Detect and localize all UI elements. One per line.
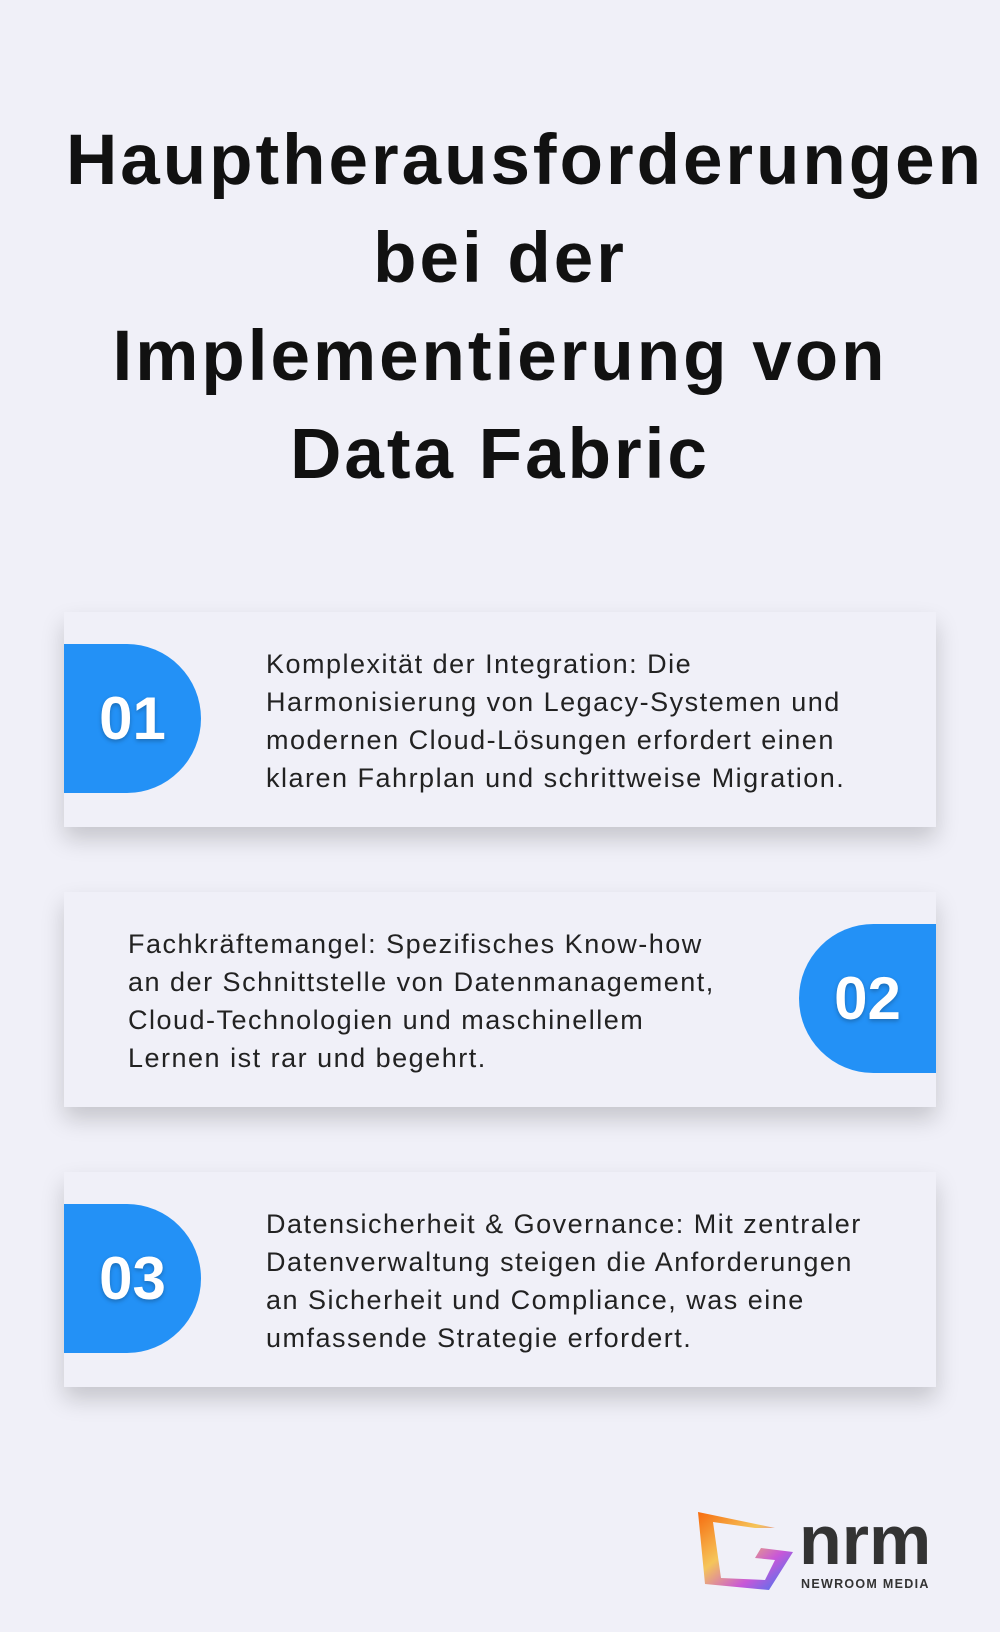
text 2: Lernen ist rar und begehrt. [128,1043,487,1073]
text 3 [266,1209,862,1353]
text 3: Datenverwaltung steigen die Anforderungen [266,1247,853,1277]
badge 02: 02 [834,965,901,1032]
text 2: Fachkräftemangel: Spezifisches Know-how [128,929,703,959]
logo: NEWROOM MEDIA [801,1577,930,1591]
text 1: klaren Fahrplan und schrittweise Migration. [266,763,845,793]
text 3: Datensicherheit & Governance: Mit zentraler [266,1209,862,1239]
title: Data Fabric [290,415,710,494]
logo [698,1510,931,1591]
text 3: an Sicherheit und Compliance, was eine [266,1285,805,1315]
text 1: modernen Cloud-Lösungen erfordert einen [266,725,835,755]
text 1: Komplexität der Integration: Die [266,649,692,679]
badge 03 [64,1204,201,1353]
panel: challenge 3 [64,1172,936,1387]
text 2 [128,929,715,1073]
title [66,121,984,494]
title: bei der [373,219,627,298]
badge 03: 03 [99,1245,166,1312]
panel: challenge 2 [64,892,936,1107]
text 2: an der Schnittstelle von Datenmanagement, [128,967,715,997]
text 2: Cloud-Technologien und maschinellem [128,1005,644,1035]
badge 02 [799,924,936,1073]
title: Implementierung von [112,317,887,396]
title: Hauptherausforderungen [66,121,984,200]
panel: challenge 1 [64,612,936,827]
text 3: umfassende Strategie erfordert. [266,1323,692,1353]
badge 01 [64,644,201,793]
text 1 [266,649,845,793]
text 1: Harmonisierung von Legacy-Systemen und [266,687,841,717]
badge 01: 01 [99,685,166,752]
